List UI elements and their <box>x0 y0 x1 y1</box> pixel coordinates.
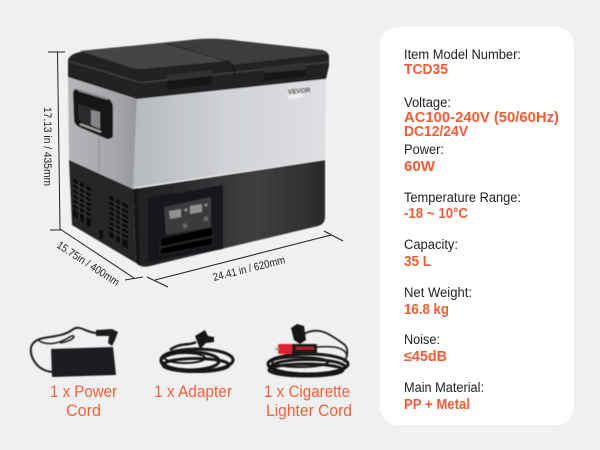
spec: noise: Noise: <box>404 332 440 347</box>
lid rim highlight <box>69 61 329 82</box>
spec: voltage: Voltage: <box>404 95 451 110</box>
lid seam <box>232 63 235 76</box>
label: 1 x Cigarette Lighter Cord: Lighter Cord <box>266 402 352 420</box>
dimension: width: 24.41 in / 620mm <box>212 254 287 284</box>
label: 1 x Cigarette Lighter Cord <box>264 383 352 420</box>
control panel <box>148 185 223 262</box>
cooler front grey panel <box>133 79 326 189</box>
spec: capacity: 35 L <box>404 254 431 270</box>
accessory: cigarette lighter cord <box>268 324 348 376</box>
dimension: depth <box>54 229 143 289</box>
spec: main material: Main Material: <box>404 380 484 395</box>
dimension: depth: 15.75in / 400mm <box>54 239 121 289</box>
spec: main material: PP + Metal <box>404 397 470 413</box>
side handle <box>73 89 113 139</box>
dimension: width <box>147 231 343 287</box>
lid <box>68 39 329 99</box>
spec: temperature range <box>404 190 521 222</box>
spec: voltage: AC100-240V (50/60Hz) <box>404 110 559 126</box>
panel: specifications <box>380 27 574 425</box>
dimension: height: 17.13 in / 435mm <box>41 107 53 186</box>
spec: net weight: 16.8 kg <box>404 302 449 318</box>
label: 1 x Adapter: 1 x Adapter <box>154 383 232 401</box>
spec: power: 60W <box>404 159 435 175</box>
spec: item model number <box>404 47 521 78</box>
label: 1 x Power Cord <box>50 383 117 420</box>
spec: temperature range: Temperature Range: <box>404 190 521 205</box>
spec: item model number: TCD35 <box>404 62 448 78</box>
accessory: power cord <box>31 328 118 377</box>
spec: noise: ≤45dB <box>404 349 447 365</box>
spec: main material <box>404 380 484 413</box>
spec: noise <box>404 332 447 365</box>
spec: capacity <box>404 237 458 270</box>
spec: power: Power: <box>404 142 444 157</box>
spec: item model number: Item Model Number: <box>404 47 521 62</box>
cooler product photo <box>68 39 329 267</box>
lid top surfaces <box>80 39 326 69</box>
label: 1 x Power Cord: Cord <box>66 402 101 420</box>
spec: capacity: Capacity: <box>404 237 458 252</box>
label: 1 x Cigarette Lighter Cord: 1 x Cigarette <box>264 383 350 401</box>
display <box>164 197 211 235</box>
vent rows <box>160 227 213 247</box>
spec: voltage: DC12/24V <box>404 124 468 140</box>
spec: temperature range: -18 ~ 10°C <box>404 206 468 222</box>
spec: voltage <box>404 95 559 140</box>
cooler left side grey panel <box>68 77 137 189</box>
spec: net weight <box>404 285 472 318</box>
lid latches <box>167 70 212 90</box>
cooler front dark base <box>133 160 325 267</box>
spec: power <box>404 142 444 175</box>
accessory: adapter cable <box>161 330 233 372</box>
spec: net weight: Net Weight: <box>404 285 472 300</box>
cooler left base with vents <box>69 160 136 263</box>
label: 1 x Power Cord: 1 x Power <box>50 383 117 401</box>
brand logo: VEVOR <box>288 87 311 96</box>
